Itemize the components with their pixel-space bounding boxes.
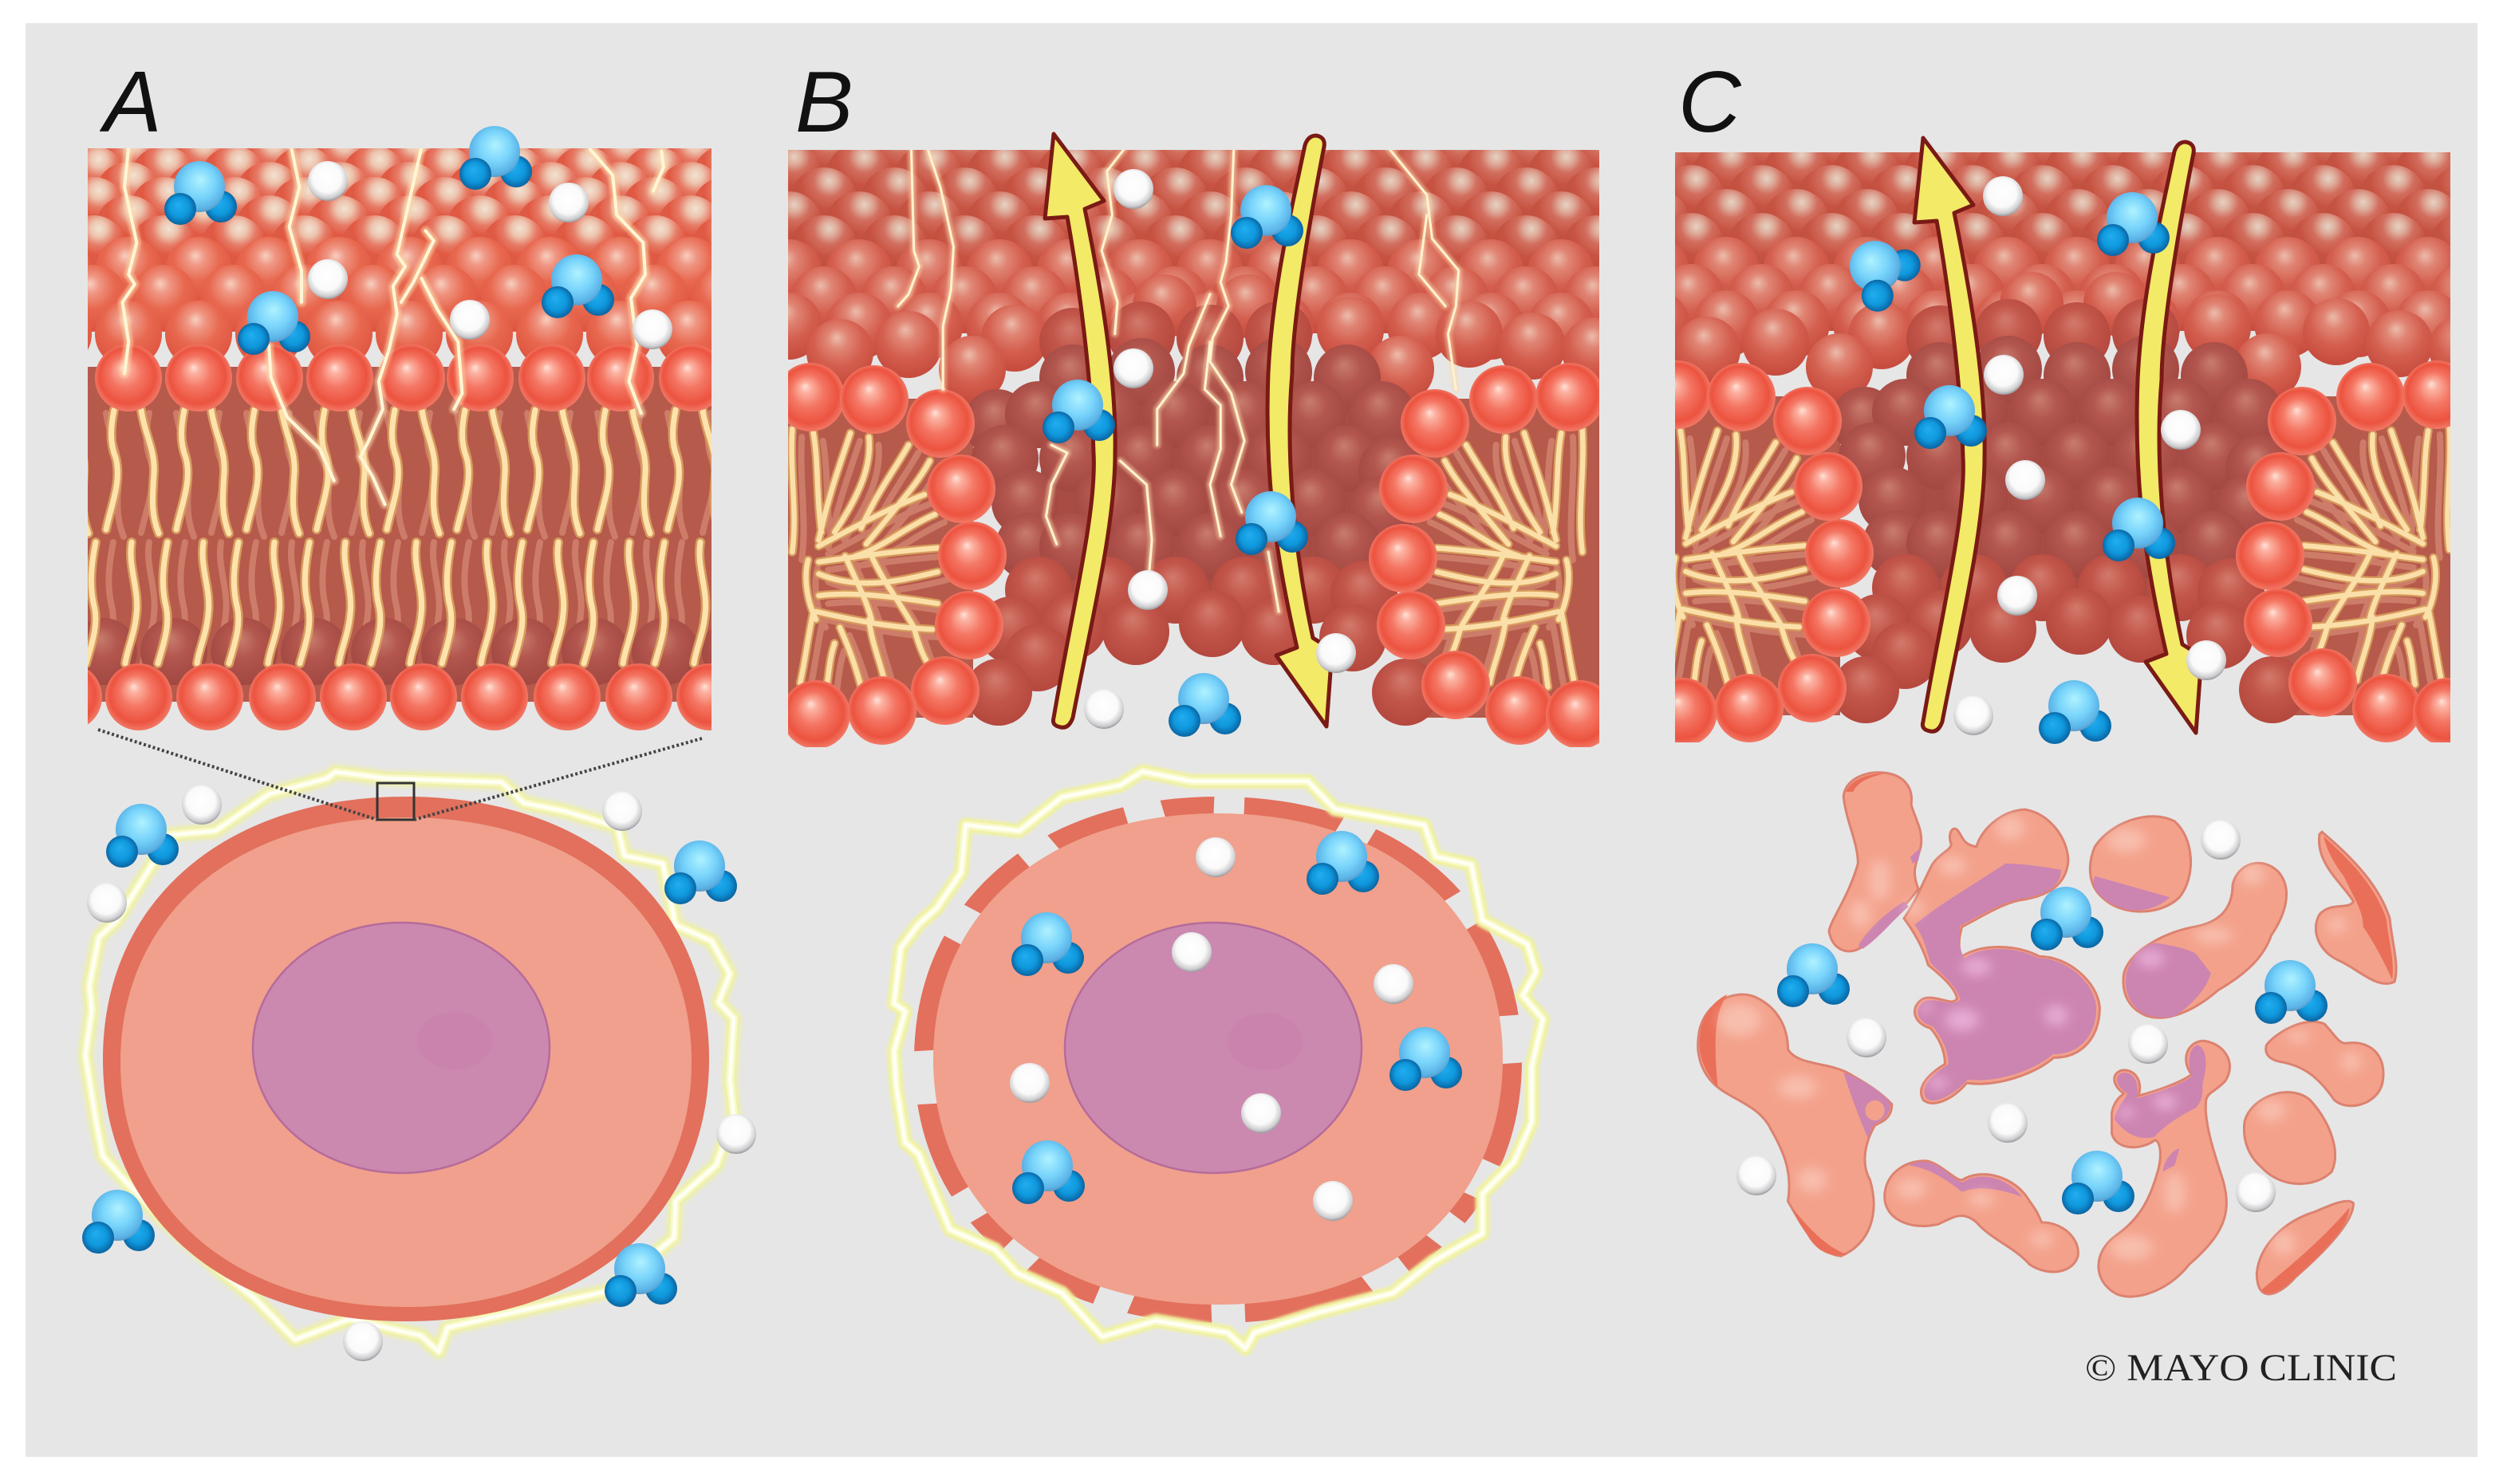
cytoplasm	[120, 817, 692, 1307]
ions: panel A top	[308, 161, 672, 349]
upper leaflet tails	[36, 410, 720, 533]
panel B: pore with electric field	[788, 134, 1599, 747]
lower leaflet tails	[86, 542, 706, 663]
arrow: flow in	[1267, 136, 1332, 726]
zoom locator square	[377, 783, 414, 820]
lipid surface spheres	[88, 148, 711, 357]
water molecules	[82, 804, 737, 1307]
ions: panel C top	[1953, 176, 2226, 735]
arrow: flow out	[1914, 138, 1985, 731]
arrow: flow in	[2137, 142, 2201, 733]
water molecules	[1011, 831, 1462, 1204]
ions	[87, 785, 756, 1361]
cell membrane	[103, 797, 709, 1321]
panel A: intact lipid bilayer	[88, 128, 711, 922]
electric halo	[85, 772, 734, 1352]
right long fragment	[2123, 862, 2286, 1018]
upper-left fragment	[1829, 773, 1922, 951]
membrane pores	[898, 785, 1538, 1336]
membrane ring	[928, 810, 1508, 1309]
nucleus	[1065, 923, 1362, 1173]
heading: C: C	[1678, 53, 1742, 151]
panel C: pore after electric field	[1587, 121, 2503, 746]
inner membrane background	[88, 367, 711, 702]
water molecules: panel B top	[1043, 185, 1308, 737]
lightning: electric field	[123, 148, 664, 505]
ions: panel C cell	[1736, 820, 2276, 1212]
panel A: whole cell	[82, 730, 756, 1361]
panel C: fragmented cell blobs	[1698, 773, 2396, 1297]
ions: panel B top	[1084, 169, 1356, 729]
water molecules: panel A top	[164, 126, 614, 355]
copyright: © MAYO CLINIC	[2085, 1347, 2397, 1389]
arrow: flow out	[1045, 134, 1115, 727]
zoom guide lines	[98, 730, 702, 820]
lightning: electric field	[898, 148, 1459, 612]
lower rear lipid heads	[88, 618, 711, 685]
membrane with pore	[1587, 121, 2503, 746]
upper leaflet heads	[95, 344, 726, 411]
centre-bottom fragment	[2099, 1041, 2229, 1297]
lower leaflet heads	[88, 663, 711, 730]
cytoplasm	[933, 813, 1503, 1305]
far-right thin fragment	[2316, 832, 2396, 984]
ions	[1010, 837, 1413, 1221]
water molecules: panel C top	[1832, 192, 2175, 744]
nucleus	[253, 923, 550, 1173]
bottom chain fragment	[1885, 1161, 2078, 1272]
heading: B: B	[795, 53, 853, 151]
top round fragment	[2090, 817, 2191, 911]
nucleolus	[1228, 1013, 1303, 1070]
right middle fragment	[2266, 1021, 2383, 1106]
water molecules: panel C cell	[1777, 887, 2328, 1214]
bottom-right thin fragment	[2257, 1201, 2354, 1294]
nucleolus	[417, 1012, 492, 1069]
nucleus-bearing fragment	[1904, 809, 2099, 1103]
left large fragment	[1698, 994, 1892, 1256]
electric halo	[894, 771, 1543, 1348]
heading: A: A	[99, 53, 162, 151]
right oval fragment	[2244, 1092, 2335, 1184]
rear tails	[71, 413, 755, 663]
membrane with pore	[788, 134, 1599, 747]
panel B: permeabilized cell	[894, 771, 1543, 1348]
